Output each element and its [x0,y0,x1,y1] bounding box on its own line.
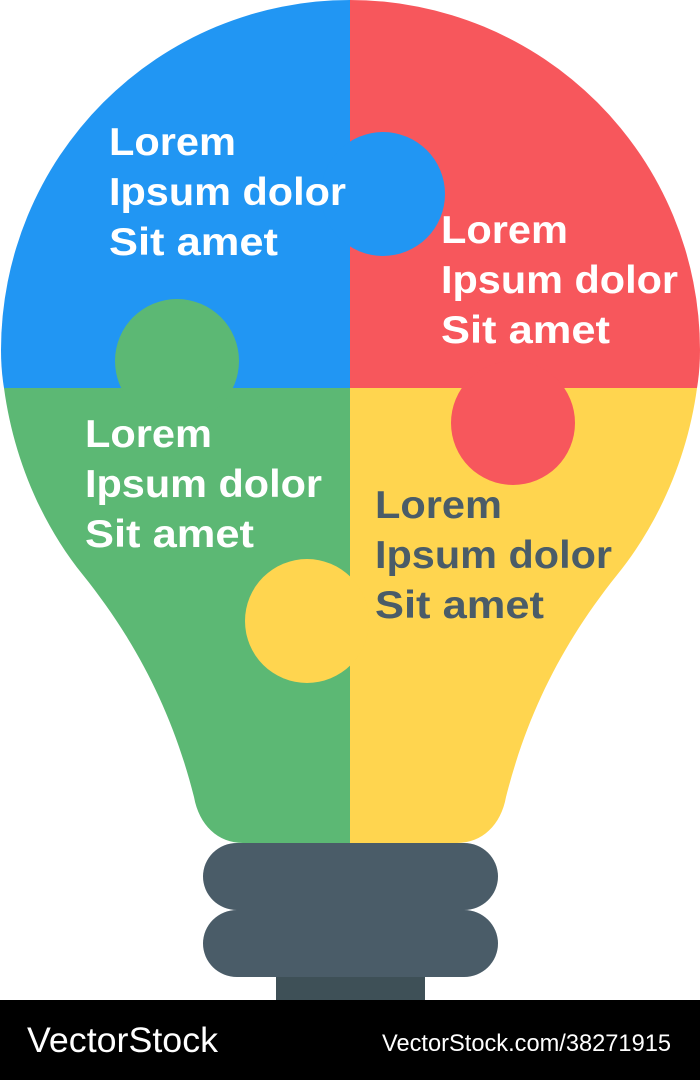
bulb puzzle [1,0,700,843]
text block: green piece: Ipsum dolor [85,463,322,506]
panel: blue top-left piece [1,0,445,388]
icon: bulb screw base [203,843,498,1000]
text block: blue piece: Sit amet [109,221,278,264]
text block: blue piece: Ipsum dolor [109,171,346,214]
text block: yellow piece: Lorem [375,484,502,527]
text block: blue piece: Lorem [109,121,236,164]
watermark footer bar [0,1000,700,1080]
text block: green piece: Lorem [85,413,212,456]
panel: yellow bottom-right piece [245,361,697,843]
text block: red piece: Ipsum dolor [441,259,678,302]
text block: yellow piece: Sit amet [375,584,544,627]
text block: red piece: Sit amet [441,309,610,352]
text block: red piece: Lorem [441,209,568,252]
panel: green bottom-left piece [4,299,350,843]
text block: yellow piece: Ipsum dolor [375,534,612,577]
brand name: VectorStock [27,1021,219,1060]
text block: green piece: Sit amet [85,513,254,556]
panel: red top-right piece [350,0,700,388]
image url: VectorStock.com/38271915 [382,1030,671,1057]
